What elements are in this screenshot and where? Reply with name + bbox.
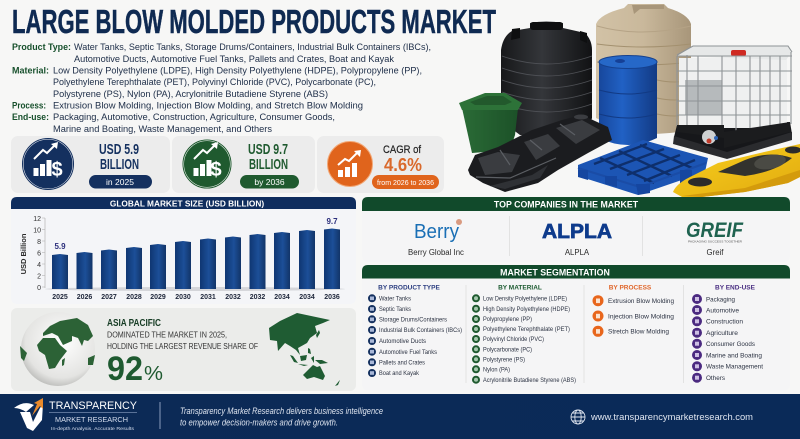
column: by end-use: Others [706,375,726,382]
column: by end-use [692,284,763,383]
title: LARGE BLOW MOLDED PRODUCTS MARKET [12,3,496,40]
value: USD 5.9 [99,141,139,158]
column: by material: Low Density Polyethylene (LDPE) [483,296,567,302]
end-use: Marine and Boating, Waste Management, and Others [53,124,272,134]
bar chart: 2027 [101,294,117,301]
company: Greif: GREIF [686,219,744,242]
bar chart: 2028 [126,294,142,301]
column: by process [592,284,674,337]
value: BILLION [100,156,139,173]
column: by material: Nylon (PA) [483,366,510,374]
end-use: End-use: [12,112,49,122]
company: Berry [408,219,464,257]
pill: in 2025 [106,177,134,187]
region name: ASIA PACIFIC [107,317,161,329]
bar chart [19,216,345,301]
value [99,141,139,173]
bar chart: 8 [37,239,41,246]
process: Process: [12,100,46,110]
column: by product type: Septic Tanks [379,306,411,313]
column: by material: Acrylonitrile Butadiene Styrene (ABS) [483,377,576,384]
bar chart: 2030 [175,294,191,301]
blue drum [599,56,657,145]
stat card: CAGR [317,136,444,193]
column: by material: BY MATERIAL [498,284,542,292]
column: by end-use: Consumer Goods [706,341,756,348]
column: by product type: Boat and Kayak [379,370,420,377]
column: by end-use: Waste Management [706,364,763,371]
bar chart: 12 [33,216,41,223]
segmentation heading [362,265,790,278]
column: by end-use: Automotive [706,307,739,314]
scope text block [12,42,431,134]
black tank [501,22,592,135]
green bin [459,93,522,153]
column: by material: High Density Polyethylene (HDPE) [483,306,570,313]
column: by product type: Storage Drums/Containers [379,316,447,324]
bar chart: 2032 [225,294,241,301]
pill: from 2026 to 2036 [377,180,434,187]
pill: by 2036 [254,177,285,187]
value: BILLION [249,156,288,173]
bar chart: 0 [37,285,41,292]
company: Berry: Berry [414,221,459,243]
yellow kayak [673,144,800,197]
bar chart: 2031 [200,294,216,301]
logo wordmark: MARKET RESEARCH [55,415,128,424]
bar chart: 2 [37,274,41,280]
bar chart: 6 [37,250,41,258]
product type: Water Tanks, Septic Tanks, Storage Drums/Containers, Industrial Bulk Containers (IBCs), [74,42,431,52]
bar chart: 2034 [299,294,315,301]
column: by process: BY PROCESS [609,284,652,292]
product type [12,42,431,64]
icon: growth chart orange [328,142,372,186]
end-use [12,112,335,134]
blue pallet [578,140,708,195]
IBC container [673,46,792,159]
column: by end-use: BY END-USE [715,284,756,292]
column: by end-use: Construction [706,319,743,326]
tagline: to empower decision-makers and drive growth. [180,418,338,428]
column: by material: Polyvinyl Chloride (PVC) [483,336,544,343]
bar chart: 9.7 [326,217,338,226]
share value [107,350,163,388]
bar chart: 2025 [52,294,68,301]
logo mark [14,398,43,431]
panel: global market size [11,197,356,304]
icon: growth chart navy: $ [51,159,63,181]
chart heading [11,197,356,209]
bar chart: 2029 [150,294,166,301]
company: Berry: Berry Global Inc [408,248,464,257]
region description [107,330,258,351]
company: ALPLA: ALPLA [565,248,590,257]
column: by material: Polypropylene (PP) [483,316,532,323]
material [12,66,422,99]
column: by process: Stretch Blow Molding [608,329,669,336]
material: Low Density Polyethylene (LDPE), High Density Polyethylene (HDPE), Polypropylene (PP), [53,66,422,76]
end-use: Packaging, Automotive, Construction, Agriculture, Consumer Goods, [53,112,335,122]
column: by product type: Water Tanks [379,296,411,302]
column: by process: Extrusion Blow Molding [608,298,674,305]
stat card: 2036 market size [172,136,315,193]
value: USD 9.7 [248,141,288,158]
bar chart: 10 [33,228,41,234]
icon: Asia Pacific map [269,313,340,386]
panel: Asia Pacific [11,308,356,391]
column: by material [472,284,576,384]
column: by product type: BY PRODUCT TYPE [378,284,440,292]
value [248,141,288,173]
column: by material: Polycarbonate (PC) [483,346,532,354]
region description: HOLDING THE LARGEST REVENUE SHARE OF [107,342,258,351]
column: by product type [368,284,462,377]
bar chart: 2026 [77,294,92,301]
company: Greif: PACKAGING SUCCESS TOGETHER [688,240,742,244]
beige tank [596,4,691,134]
company: ALPLA [542,221,612,257]
black fuel tank [468,114,612,192]
panel: top companies [362,197,790,262]
column: by product type: Automotive Fuel Tanks [379,349,437,356]
icon: growth chart green [183,140,231,188]
column: by process: Injection Blow Molding [608,313,674,320]
panel: market segmentation [362,265,790,390]
companies heading [362,197,790,211]
pill [240,175,299,188]
bar chart: 2036 [324,294,340,301]
tagline [180,406,383,428]
column: by end-use: Packaging [706,296,735,303]
website: www.transparencymarketresearch.com [590,412,753,423]
companies heading: TOP COMPANIES IN THE MARKET [494,200,639,210]
material: Polystyrene (PS), Nylon (PA), Acrylonitrile Butadiene Styrene (ABS) [53,89,328,99]
product type: Product Type: [12,42,71,52]
chart heading: GLOBAL MARKET SIZE (USD BILLION) [110,198,264,208]
column: by end-use: Agriculture [706,330,738,337]
logo wordmark: In-depth Analysis. Accurate Results [51,426,135,431]
bar chart: 4 [37,262,41,269]
tagline: Transparency Market Research delivers business intelligence [180,406,383,416]
logo wordmark: TRANSPARENCY [49,400,138,412]
share value: % [144,363,163,385]
stat card: 2025 market size [11,136,170,193]
region description: DOMINATED THE MARKET IN 2025, [107,330,227,340]
column: by product type: Industrial Bulk Containers (IBCs) [379,327,462,334]
material: Material: [12,66,49,76]
bar chart: USD Billion [19,233,28,274]
process: Extrusion Blow Molding, Injection Blow Molding, and Stretch Blow Molding [53,100,363,110]
column: by material: Polyethylene Terephthalate (PET) [483,326,570,333]
company: Greif [686,219,744,257]
bar chart: 2034 [274,294,290,301]
bar chart: 2032 [250,294,265,301]
column: by end-use: Marine and Boating [706,352,762,359]
company: ALPLA: ALPLA [542,221,612,243]
share value: 92 [107,350,143,388]
company: Greif: Greif [707,248,724,257]
icon: growth chart navy [22,138,74,190]
column: by product type: Pallets and Crates [379,360,425,366]
segmentation heading: MARKET SEGMENTATION [500,268,610,278]
column: by product type: Automotive Ducts [379,338,426,345]
column: by material: Polystyrene (PS) [483,356,525,364]
product type: Automotive Ducts, Automotive Fuel Tanks, Pallets and Crates, Boat and Kayak [74,54,394,64]
CAGR label: CAGR of [383,144,422,156]
CAGR value: 4.6% [384,155,422,175]
bar chart: 5.9 [54,242,66,251]
footer [0,394,800,439]
pill [89,175,152,188]
icon: web globe [571,410,585,424]
logo wordmark [49,400,138,431]
product illustration [459,4,800,197]
material: Polyethylene Terephthalate (PET), Polyvinyl Chloride (PVC), Polycarbonate (PC), [53,77,376,87]
icon: globe [20,312,95,386]
icon: growth chart green: $ [210,159,222,181]
